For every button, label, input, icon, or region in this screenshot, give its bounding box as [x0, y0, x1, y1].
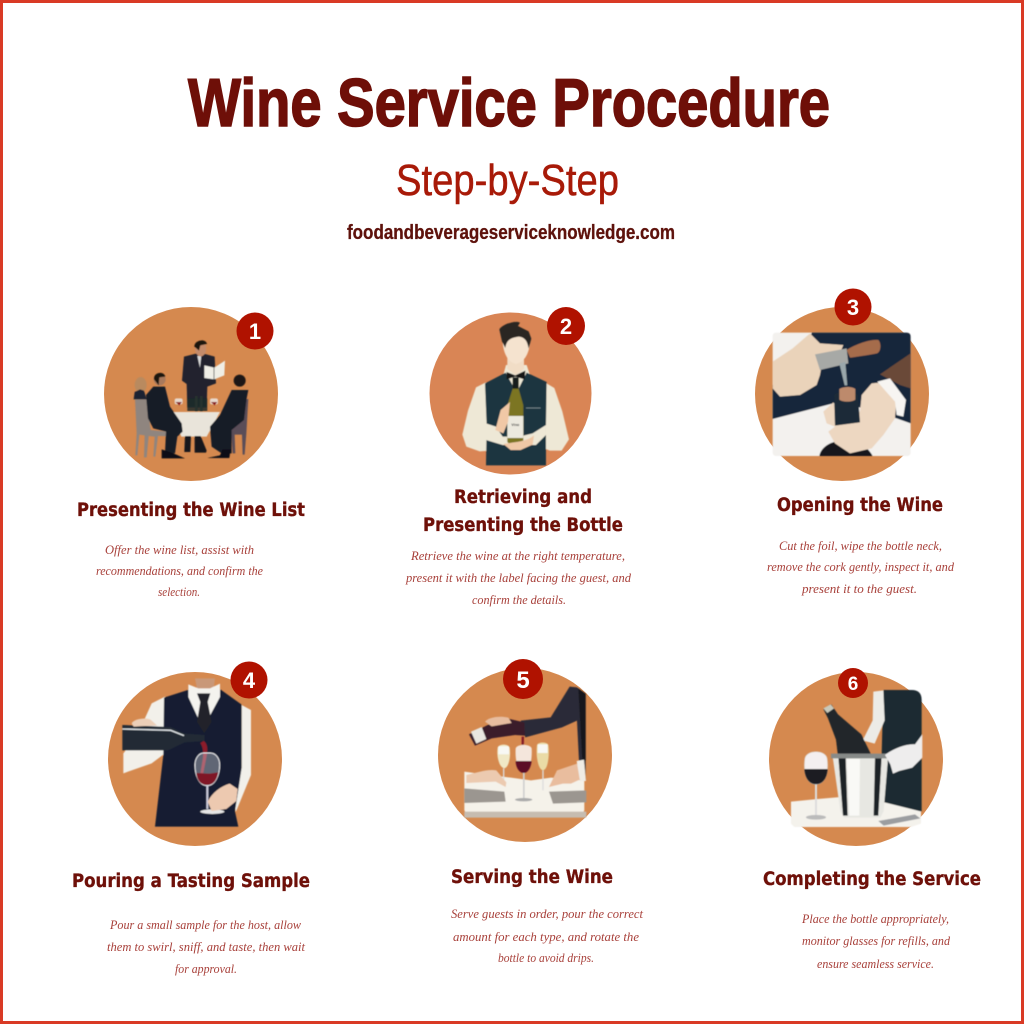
- description: [405, 549, 632, 607]
- number badge 5: [503, 659, 543, 699]
- website: foodandbeverageserviceknowledge.com: [347, 222, 675, 244]
- description: Retrieve the wine at the right temperature,: [410, 549, 625, 563]
- description: Serve guests in order, pour the correct: [451, 907, 644, 921]
- description: ensure seamless service.: [817, 957, 934, 971]
- description: amount for each type, and rotate the: [453, 930, 639, 944]
- panel: step 5: [438, 659, 644, 965]
- icon: waiter holding bottle: Vino: [511, 423, 520, 427]
- number badge 4: [230, 662, 268, 698]
- number badge 6: [838, 668, 868, 698]
- panel: step 2: [405, 307, 632, 607]
- description: them to swirl, sniff, and taste, then wait: [107, 940, 306, 954]
- panel: step 3: [755, 288, 955, 596]
- panel: step 1: [77, 307, 305, 599]
- number badge 5: 5: [516, 667, 530, 694]
- description: confirm the details.: [472, 593, 566, 607]
- description: for approval.: [175, 962, 237, 976]
- description: [96, 543, 263, 599]
- icon: waiter holding bottle: [430, 312, 592, 474]
- title: Wine Service Procedure: [188, 65, 830, 141]
- number badge 1: 1: [249, 319, 261, 344]
- heading: Retrieving and: [454, 487, 592, 508]
- heading: [423, 487, 623, 536]
- icon: bottle in ice bucket: [769, 672, 943, 846]
- description: present it to the guest.: [801, 582, 917, 596]
- panel: step 6: [763, 668, 981, 971]
- description: bottle to avoid drips.: [498, 951, 594, 965]
- description: Cut the foil, wipe the bottle neck,: [779, 539, 942, 553]
- icon: waiter presenting wine list to guests: [104, 307, 278, 481]
- number badge 6: 6: [848, 674, 858, 695]
- description: monitor glasses for refills, and: [802, 934, 951, 948]
- description: Pour a small sample for the host, allow: [109, 918, 302, 932]
- description: present it with the label facing the guest, and: [405, 571, 632, 585]
- description: [767, 539, 955, 596]
- number badge 3: 3: [847, 295, 859, 320]
- heading: Opening the Wine: [777, 495, 943, 516]
- description: [451, 907, 644, 965]
- heading: Serving the Wine: [451, 867, 613, 888]
- number badge 3: [834, 288, 872, 326]
- number badge 4: 4: [243, 668, 256, 693]
- subtitle: Step-by-Step: [396, 156, 619, 205]
- description: selection.: [158, 585, 200, 599]
- heading: Presenting the Wine List: [77, 500, 305, 521]
- icon: serving wine to guests: [438, 668, 612, 842]
- number badge 2: 2: [560, 314, 572, 339]
- number badge 1: [236, 312, 274, 350]
- heading: Presenting the Bottle: [423, 515, 623, 536]
- icon: opening the wine with corkscrew: [755, 307, 929, 481]
- heading: Pouring a Tasting Sample: [72, 871, 310, 892]
- description: remove the cork gently, inspect it, and: [767, 560, 955, 574]
- description: Offer the wine list, assist with: [105, 543, 254, 557]
- panel: step 4: [72, 662, 310, 976]
- description: recommendations, and confirm the: [96, 564, 263, 578]
- description: [107, 918, 306, 976]
- number badge 2: [547, 307, 585, 345]
- description: Place the bottle appropriately,: [801, 912, 949, 926]
- description: [801, 912, 951, 971]
- heading: Completing the Service: [763, 869, 981, 890]
- icon: pouring a tasting sample: [108, 672, 282, 846]
